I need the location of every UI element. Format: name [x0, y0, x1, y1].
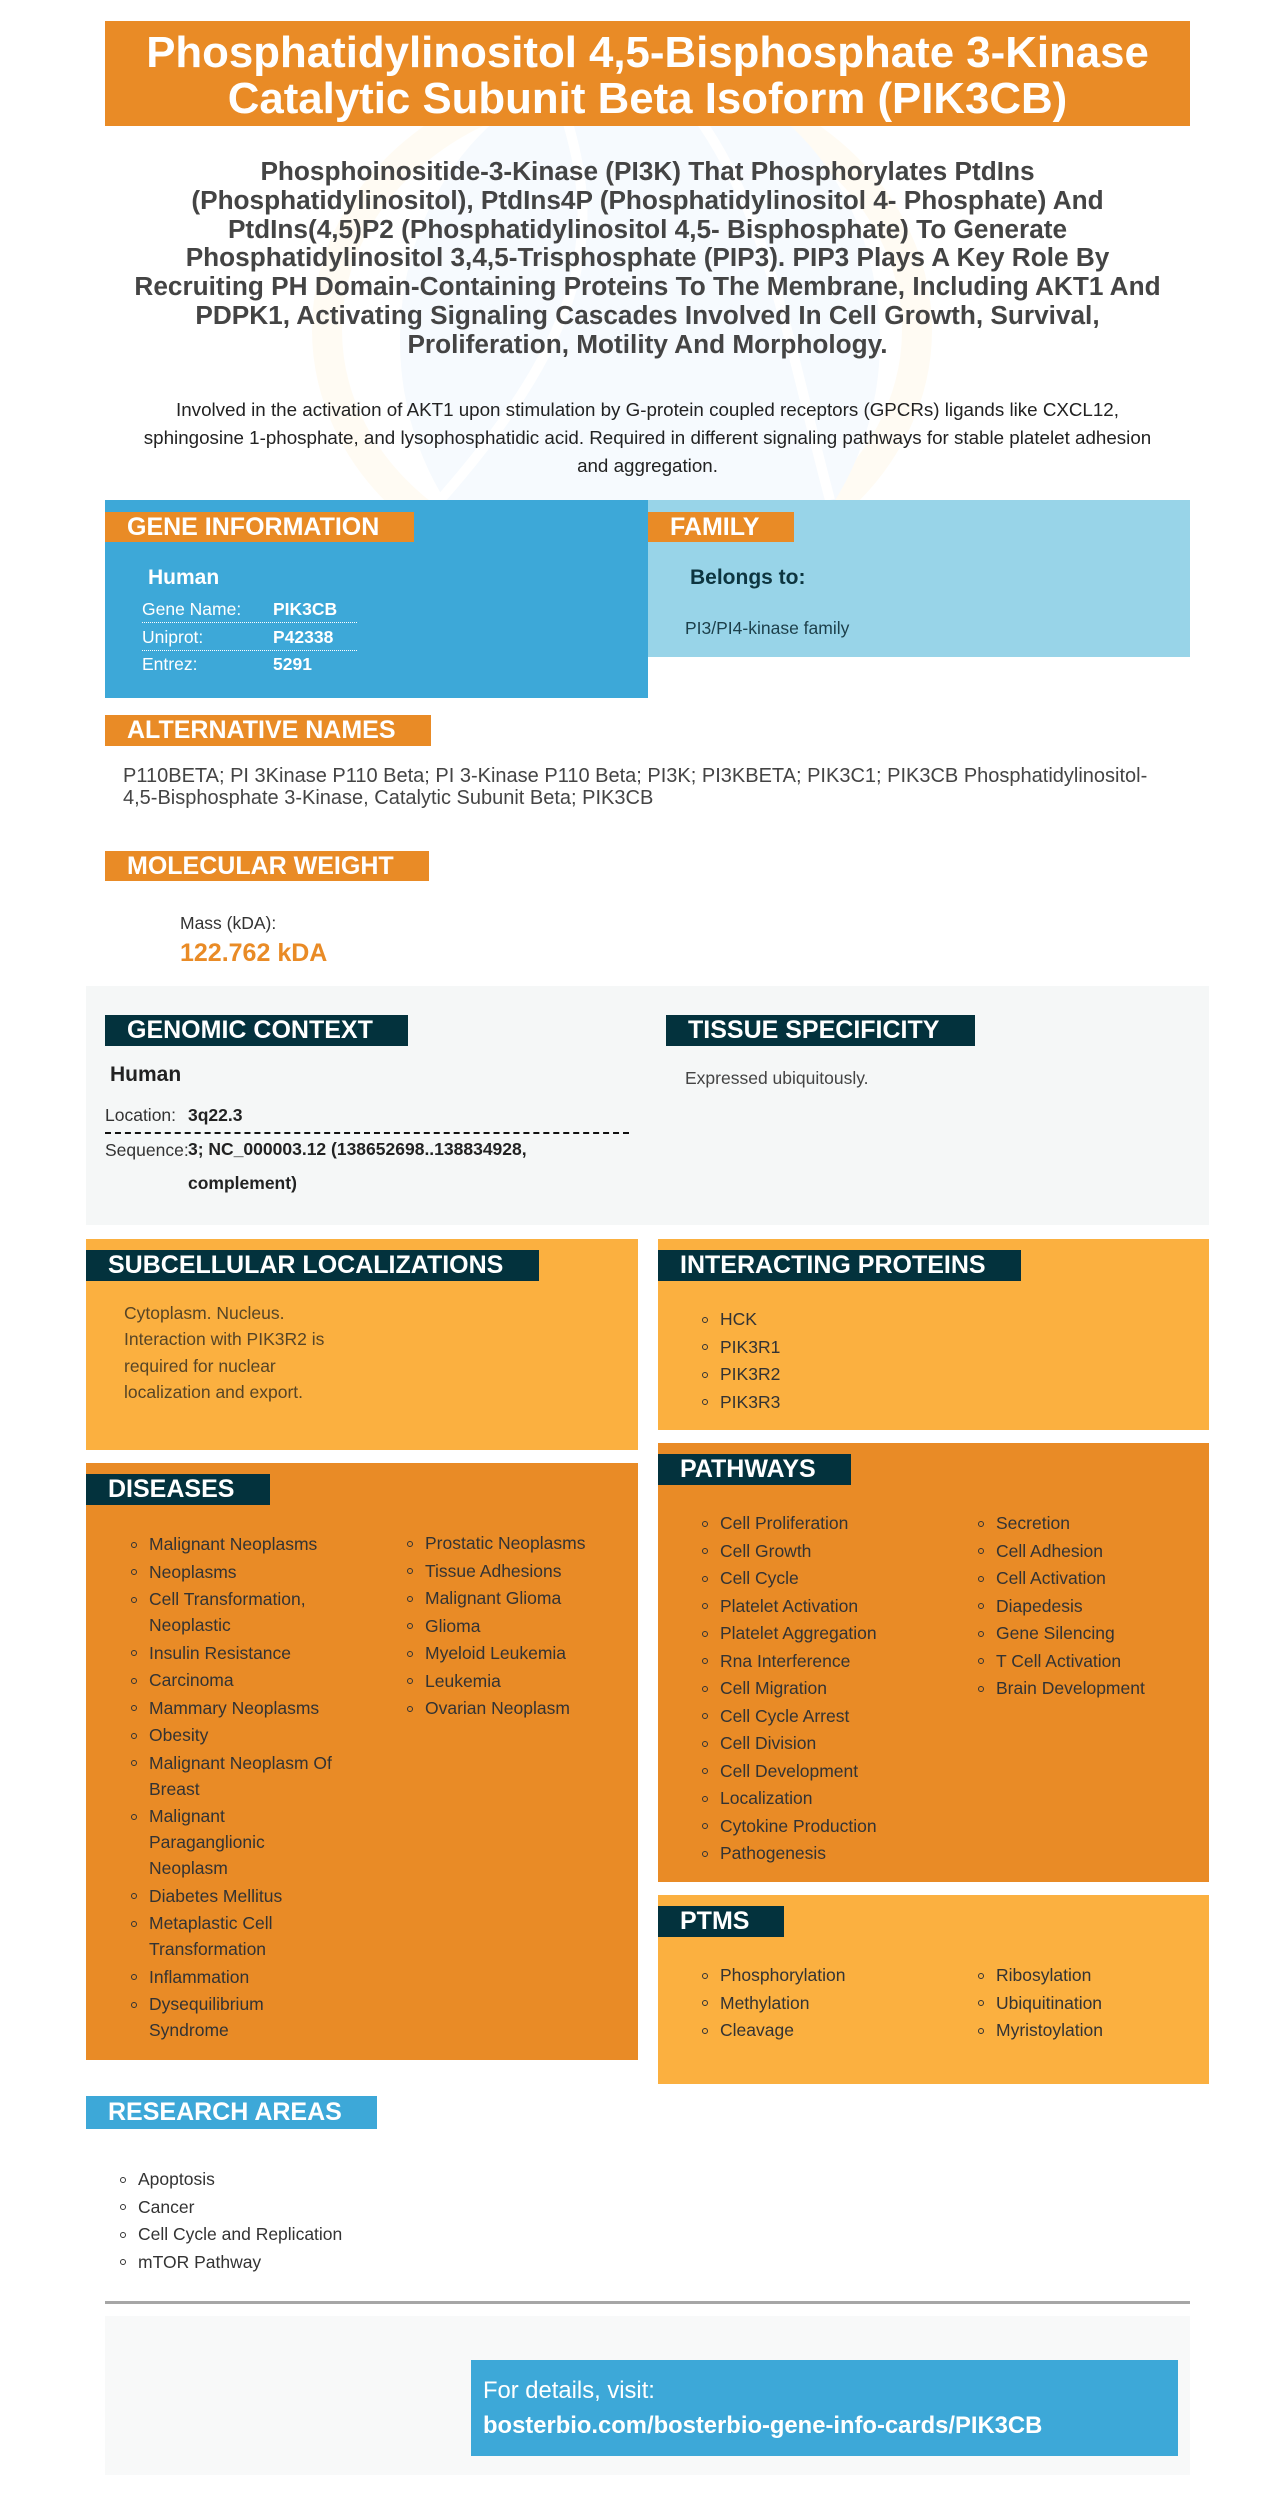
panel: ptms	[658, 1895, 1209, 2084]
pathways list column 1: Cell Cycle	[720, 1568, 799, 1588]
heading: subcellular localizations: SUBCELLULAR LOCALIZATIONS	[108, 1251, 503, 1279]
diseases list column 2: Leukemia	[425, 1670, 501, 1690]
subtitle description: PDPK1, Activating Signaling Cascades Involved In Cell Growth, Survival,	[195, 300, 1100, 330]
ptms list column 2: Ribosylation	[996, 1965, 1091, 1985]
interacting proteins list: HCK	[720, 1309, 757, 1329]
diseases list column 1: Malignant Neoplasm Of	[149, 1752, 332, 1772]
diseases list column 1	[131, 1534, 332, 2040]
pathways list column 1: Cell Development	[720, 1760, 858, 1780]
subtitle description: PtdIns(4,5)P2 (Phosphatidylinositol 4,5- Bisphosphate) To Generate	[228, 214, 1067, 244]
pathways list column 2: Secretion	[996, 1513, 1070, 1533]
pathways list column 1: Pathogenesis	[720, 1843, 826, 1863]
pathways list column 2: Cell Adhesion	[996, 1540, 1103, 1560]
research areas list: mTOR Pathway	[138, 2252, 261, 2272]
interacting proteins list: PIK3R1	[720, 1336, 780, 1356]
diseases list column 1: Paraganglionic	[149, 1832, 265, 1852]
family value: PI3/PI4-kinase family	[685, 618, 849, 638]
localization text	[124, 1303, 324, 1402]
pathways list column 2: Diapedesis	[996, 1596, 1083, 1616]
pathways list column 1: Platelet Aggregation	[720, 1623, 877, 1643]
diseases list column 1: Malignant	[149, 1806, 225, 1826]
entrez row: Entrez:	[142, 654, 197, 674]
interacting proteins list	[702, 1309, 780, 1412]
visit label: For details, visit:	[483, 2377, 655, 2404]
tissue specificity text: Expressed ubiquitously.	[685, 1068, 869, 1088]
location row: Location:	[105, 1105, 176, 1125]
diseases list column 1: Transformation	[149, 1939, 266, 1959]
alternative names text: P110BETA; PI 3Kinase P110 Beta; PI 3-Kinase P110 Beta; PI3K; PI3KBETA; PIK3C1; PIK3CB Phosphatidylinositol-	[123, 765, 1147, 787]
diseases list column 1: Neoplasms	[149, 1562, 237, 1582]
heading: interacting proteins: INTERACTING PROTEINS	[680, 1251, 986, 1279]
footer divider	[105, 2301, 1190, 2304]
watermark logo	[312, 126, 932, 500]
pathways list column 2: Gene Silencing	[996, 1623, 1115, 1643]
url: bosterbio.com/bosterbio-gene-info-cards/PIK3CB	[483, 2412, 1042, 2439]
heading: research areas	[86, 2096, 377, 2129]
panel: genomic context and tissue specificity	[86, 986, 1209, 1225]
interacting proteins list: PIK3R2	[720, 1364, 780, 1384]
diseases list column 2: Prostatic Neoplasms	[425, 1533, 585, 1553]
heading: family	[648, 512, 794, 542]
diseases list column 2: Myeloid Leukemia	[425, 1643, 566, 1663]
sequence row	[105, 1139, 527, 1192]
diseases list column 2: Ovarian Neoplasm	[425, 1698, 570, 1718]
panel: diseases	[86, 1463, 638, 2060]
diseases list column 1: Inflammation	[149, 1966, 249, 1986]
pathways list column 2: Cell Activation	[996, 1568, 1106, 1588]
pathways list column 1: Cell Migration	[720, 1678, 827, 1698]
heading: alternative names: ALTERNATIVE NAMES	[127, 716, 396, 744]
panel: genomic context and tissue specificity: complement)	[188, 1172, 297, 1192]
panel: family	[648, 500, 1190, 657]
heading: genomic context: GENOMIC CONTEXT	[127, 1016, 373, 1044]
gene name row: Gene Name:	[142, 599, 241, 619]
heading: diseases	[86, 1474, 270, 1505]
pathways list column 1: Rna Interference	[720, 1650, 850, 1670]
pathways list column 1: Cell Cycle Arrest	[720, 1706, 849, 1726]
heading: diseases: DISEASES	[108, 1475, 234, 1503]
subtitle description: Phosphoinositide-3-Kinase (PI3K) That Phosphorylates PtdIns	[260, 156, 1035, 186]
panel: genomic context and tissue specificity: 3; NC_000003.12 (138652698..138834928,	[188, 1139, 527, 1159]
alternative names text: 4,5-Bisphosphate 3-Kinase, Catalytic Subunit Beta; PIK3CB	[123, 787, 653, 809]
heading: pathways	[658, 1454, 851, 1485]
diseases list column 2: Malignant Glioma	[425, 1588, 561, 1608]
diseases list column 1: Dysequilibrium	[149, 1994, 264, 2014]
title banner	[105, 21, 1190, 126]
localization text: localization and export.	[124, 1382, 303, 1402]
ptms list column 2: Myristoylation	[996, 2020, 1103, 2040]
pathways list column 1: Cell Proliferation	[720, 1513, 848, 1533]
diseases list column 1: Malignant Neoplasms	[149, 1534, 317, 1554]
research areas list	[120, 2169, 342, 2272]
dashed divider	[105, 1132, 629, 1134]
panel: interacting proteins	[658, 1239, 1209, 1430]
heading: research areas: RESEARCH AREAS	[108, 2098, 342, 2126]
ptms list column 2	[978, 1965, 1103, 2040]
species label: Human	[110, 1063, 181, 1086]
localization text: Interaction with PIK3R2 is	[124, 1329, 324, 1349]
pathways list column 2: T Cell Activation	[996, 1650, 1121, 1670]
uniprot row: Uniprot:	[142, 627, 203, 647]
pathways list column 1: Cell Division	[720, 1733, 816, 1753]
panel: subcellular localizations	[86, 1239, 638, 1450]
diseases list column 1: Cell Transformation,	[149, 1589, 306, 1609]
subtitle description: Phosphatidylinositol 3,4,5-Trisphosphate (PIP3). PIP3 Plays A Key Role By	[186, 242, 1109, 272]
ptms list column 1: Cleavage	[720, 2020, 794, 2040]
alternative names text	[123, 765, 1147, 809]
pathways list column 2: Brain Development	[996, 1678, 1145, 1698]
pathways list column 1: Cell Growth	[720, 1540, 811, 1560]
species label: Human	[148, 566, 219, 589]
heading: gene information: GENE INFORMATION	[127, 513, 379, 541]
diseases list column 1: Carcinoma	[149, 1670, 234, 1690]
diseases list column 1: Insulin Resistance	[149, 1642, 291, 1662]
footer panel	[105, 2316, 1190, 2475]
uniprot row: P42338	[273, 627, 333, 647]
pathways list column 1: Localization	[720, 1788, 812, 1808]
function paragraph: and aggregation.	[577, 455, 718, 476]
mass label: Mass (kDA):	[180, 913, 276, 933]
heading: tissue specificity: TISSUE SPECIFICITY	[688, 1016, 939, 1044]
subtitle description: Recruiting PH Domain-Containing Proteins To The Membrane, Including AKT1 And	[134, 271, 1161, 301]
panel: pathways	[658, 1443, 1209, 1882]
heading: family: FAMILY	[670, 513, 759, 541]
diseases list column 1: Syndrome	[149, 2020, 229, 2040]
sequence row: Sequence:	[105, 1140, 189, 1160]
subtitle description	[134, 156, 1161, 359]
subtitle description: (Phosphatidylinositol), PtdIns4P (Phosphatidylinositol 4- Phosphate) And	[191, 185, 1104, 215]
entrez row	[142, 654, 312, 674]
function paragraph: sphingosine 1-phosphate, and lysophosphatidic acid. Required in different signaling pathways for stable platelet adhesion	[144, 427, 1151, 448]
diseases list column 1: Obesity	[149, 1725, 208, 1745]
research areas list: Apoptosis	[138, 2169, 215, 2189]
belongs to label: Belongs to:	[690, 566, 806, 589]
diseases list column 1: Neoplastic	[149, 1615, 231, 1635]
heading: ptms: PTMS	[680, 1907, 749, 1935]
panel: genomic context and tissue specificity: 3q22.3	[188, 1105, 242, 1125]
ptms list column 2: Ubiquitination	[996, 1992, 1102, 2012]
diseases list column 1: Metaplastic Cell	[149, 1913, 273, 1933]
gene name row	[142, 596, 357, 623]
title banner: Catalytic Subunit Beta Isoform (PIK3CB)	[228, 74, 1067, 123]
entrez row: 5291	[273, 654, 312, 674]
title banner: Phosphatidylinositol 4,5-Bisphosphate 3-Kinase	[146, 28, 1149, 77]
pathways list column 1	[702, 1513, 877, 1863]
uniprot row	[142, 624, 357, 651]
call to action box	[471, 2360, 1178, 2456]
heading: molecular weight: MOLECULAR WEIGHT	[127, 852, 394, 880]
diseases list column 1: Neoplasm	[149, 1858, 228, 1878]
localization text: required for nuclear	[124, 1356, 276, 1376]
heading: ptms	[658, 1906, 784, 1937]
ptms list column 1: Phosphorylation	[720, 1965, 846, 1985]
research areas list: Cancer	[138, 2196, 194, 2216]
diseases list column 1: Breast	[149, 1778, 200, 1798]
diseases list column 1: Diabetes Mellitus	[149, 1886, 282, 1906]
localization text: Cytoplasm. Nucleus.	[124, 1303, 284, 1323]
function paragraph	[144, 399, 1151, 476]
pathways list column 1: Platelet Activation	[720, 1596, 858, 1616]
diseases list column 2: Glioma	[425, 1616, 480, 1636]
mass value: 122.762 kDA	[180, 939, 327, 967]
research areas list: Cell Cycle and Replication	[138, 2224, 342, 2244]
diseases list column 1: Mammary Neoplasms	[149, 1698, 319, 1718]
heading: pathways: PATHWAYS	[680, 1455, 816, 1483]
panel: gene information	[105, 500, 648, 698]
ptms list column 1: Methylation	[720, 1992, 810, 2012]
diseases list column 2	[407, 1533, 585, 1718]
pathways list column 2	[978, 1513, 1145, 1698]
function paragraph: Involved in the activation of AKT1 upon stimulation by G-protein coupled receptors (GPCRs) ligands like CXCL12,	[176, 399, 1119, 420]
gene name row: PIK3CB	[273, 599, 337, 619]
ptms list column 1	[702, 1965, 846, 2040]
pathways list column 1: Cytokine Production	[720, 1816, 877, 1836]
location row	[105, 1105, 242, 1125]
diseases list column 2: Tissue Adhesions	[425, 1560, 562, 1580]
subtitle description: Proliferation, Motility And Morphology.	[407, 329, 888, 359]
interacting proteins list: PIK3R3	[720, 1392, 780, 1412]
